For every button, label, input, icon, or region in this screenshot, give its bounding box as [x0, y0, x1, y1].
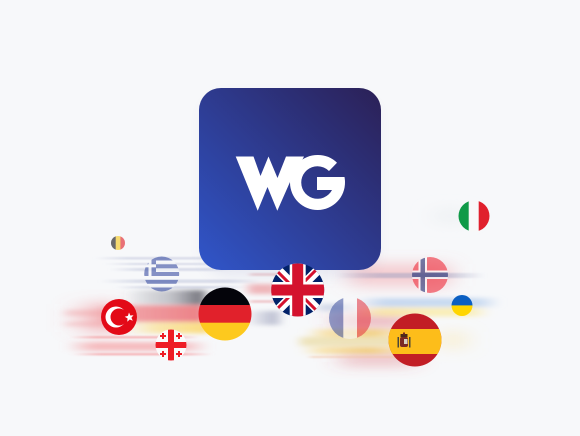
logo card shadow: [205, 98, 375, 274]
flag: Georgia: [155, 329, 187, 361]
flag: Italy: [458, 201, 490, 231]
flag: United Kingdom: [271, 264, 324, 316]
flag: Norway: [412, 257, 448, 293]
flag: Germany: [198, 287, 252, 342]
flag: Greece: [144, 256, 180, 292]
flag: Ukraine: [451, 295, 473, 316]
coat of arms: [398, 332, 410, 348]
flag: France: [329, 297, 371, 339]
speed streaks behind flags: [65, 210, 500, 364]
flag: Spain: [388, 313, 442, 367]
WG logo mark: [236, 155, 345, 211]
logo card: [199, 88, 381, 270]
flag: Belgium: [111, 236, 125, 250]
flag: Turkey: [101, 299, 137, 335]
illustration: WG logo with language flags: [60, 88, 496, 372]
